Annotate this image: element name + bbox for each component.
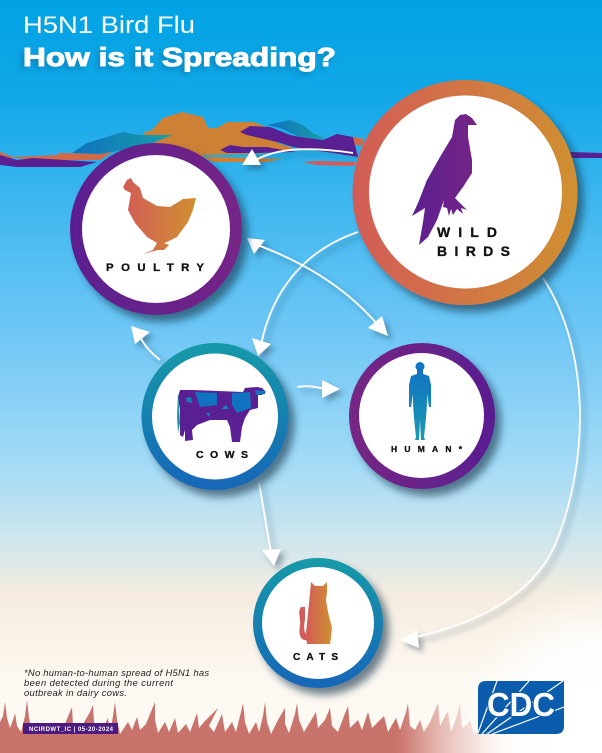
label: poultry: POULTRY xyxy=(106,262,204,274)
arrow: wild birds to poultry xyxy=(242,149,353,165)
panel: cows xyxy=(142,343,288,490)
icon: pigeon xyxy=(412,114,477,245)
landscape: clouds and horizon xyxy=(0,112,602,167)
footnote: been detected during the current xyxy=(24,677,173,688)
arrow: cows to human xyxy=(297,380,340,398)
title: H5N1 Bird Flu xyxy=(23,12,195,39)
footnote: *No human-to-human spread of H5N1 has xyxy=(24,667,209,678)
label: cows: COWS xyxy=(196,449,248,461)
icon: human figure xyxy=(409,362,431,440)
label: cats: CATS xyxy=(293,652,338,663)
arrow: wild birds to cats xyxy=(400,278,580,648)
label: human: HUMAN* xyxy=(391,444,463,454)
icon: cat xyxy=(299,582,332,644)
icon: cow xyxy=(177,387,266,442)
arrow: cows to cats xyxy=(259,483,281,566)
footnote: outbreak in dairy cows. xyxy=(24,687,127,698)
white glow behind logo xyxy=(440,570,602,753)
panel: poultry xyxy=(70,143,242,315)
CDC logo xyxy=(478,681,564,734)
panel: wild birds xyxy=(352,80,578,305)
icon: hen xyxy=(123,178,196,254)
arrow: wild birds to cows xyxy=(252,232,358,356)
publication code label: NCIRDWT_IC | 05-20-2024 xyxy=(29,727,114,733)
arrow: cows to poultry xyxy=(131,326,160,360)
arrow: poultry and human, two-way xyxy=(247,238,388,336)
label: wild birds: BIRDS xyxy=(437,243,510,259)
title xyxy=(23,12,336,72)
panel: human xyxy=(349,343,495,489)
grass xyxy=(0,700,602,753)
label: wild birds: WILD xyxy=(437,224,497,240)
label: wild birds xyxy=(437,224,510,259)
panel: cats xyxy=(253,558,383,688)
footnote xyxy=(24,667,209,698)
title: How is it Spreading? xyxy=(23,42,336,72)
publication code label xyxy=(23,723,118,734)
CDC logo: CDC xyxy=(487,686,555,723)
